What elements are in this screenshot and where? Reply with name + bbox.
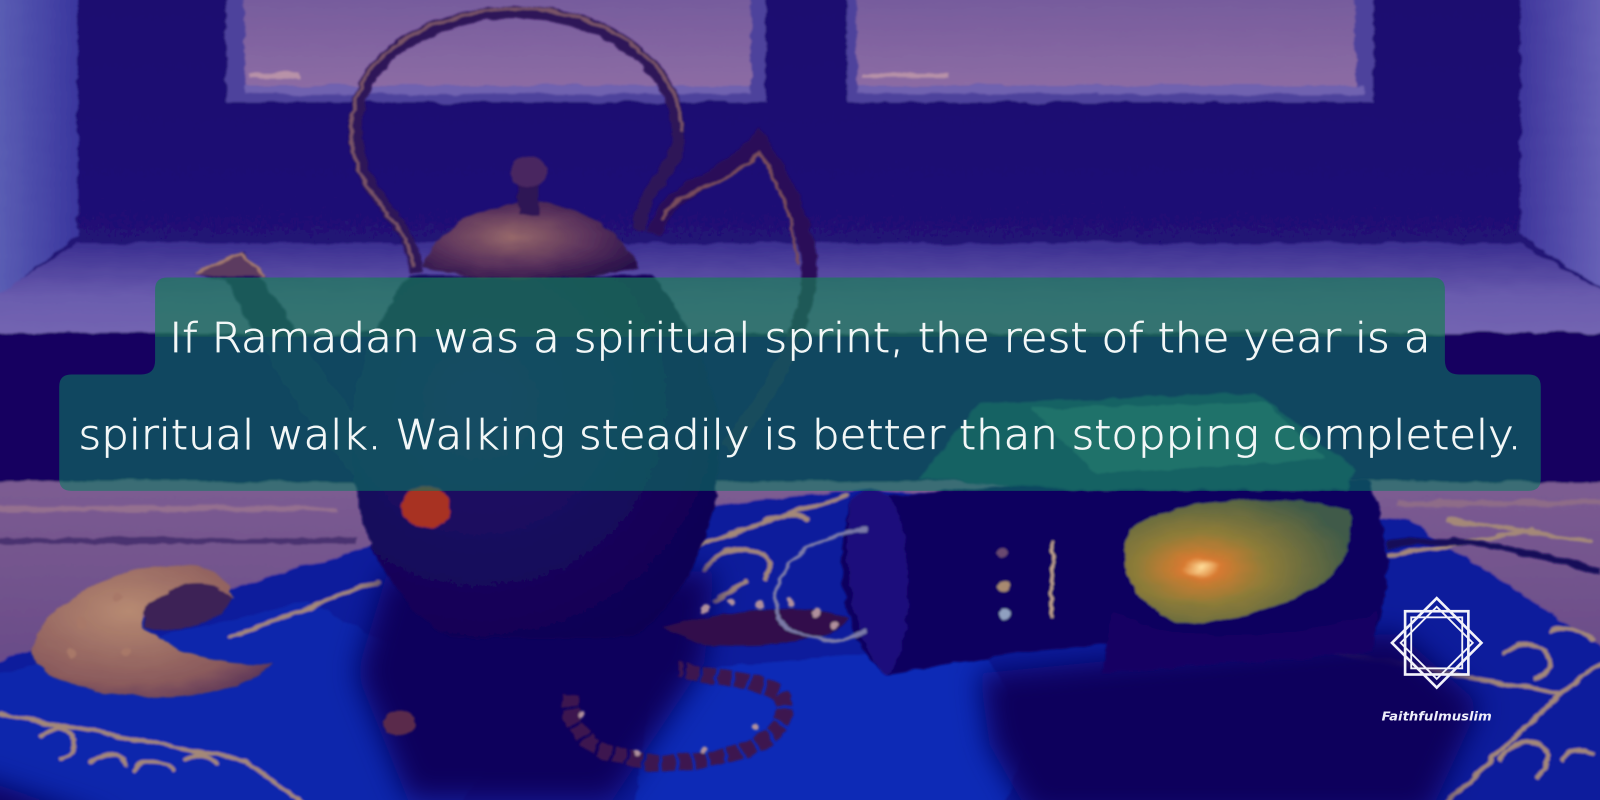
logo wordmark: Faithfulmuslim: [1382, 709, 1492, 724]
quote line 1: If Ramadan was a spiritual sprint, the rest of the year is a: [169, 314, 1431, 362]
soft table shadows: [0, 571, 1480, 800]
teapot flame reflection: [402, 487, 451, 528]
blue carpet: [0, 490, 1600, 800]
window sill: [0, 243, 1600, 341]
logo: eight-point star: [1392, 598, 1481, 688]
teapot right handle: [653, 141, 810, 449]
carpet gold ornament: [0, 495, 1600, 800]
prayer beads: [570, 598, 847, 763]
small date: [383, 710, 415, 735]
lantern cord: [1388, 541, 1600, 571]
lantern top frame: [918, 393, 1357, 490]
lantern shadow: [980, 633, 1480, 800]
right window pane: [847, 0, 1373, 102]
left table corner shade: [0, 776, 122, 800]
teapot body: [351, 276, 719, 638]
crescent cookie: [33, 566, 271, 696]
teapot shadow: [357, 571, 714, 800]
lantern glass: [1124, 500, 1351, 624]
teapot lid: [422, 156, 639, 279]
quote line 2: spiritual walk. Walking steadily is better than stopping completely.: [79, 411, 1521, 459]
quote text: [79, 314, 1521, 459]
quote highlight panel: [59, 278, 1541, 491]
lantern: [775, 393, 1387, 673]
teapot handle: [351, 8, 683, 273]
left side wall: [0, 0, 78, 301]
right side wall: [1520, 0, 1600, 296]
table top: [0, 482, 1600, 800]
teapot spout: [196, 251, 357, 480]
left window pane: [227, 0, 765, 102]
dark sill front: [0, 333, 1600, 486]
